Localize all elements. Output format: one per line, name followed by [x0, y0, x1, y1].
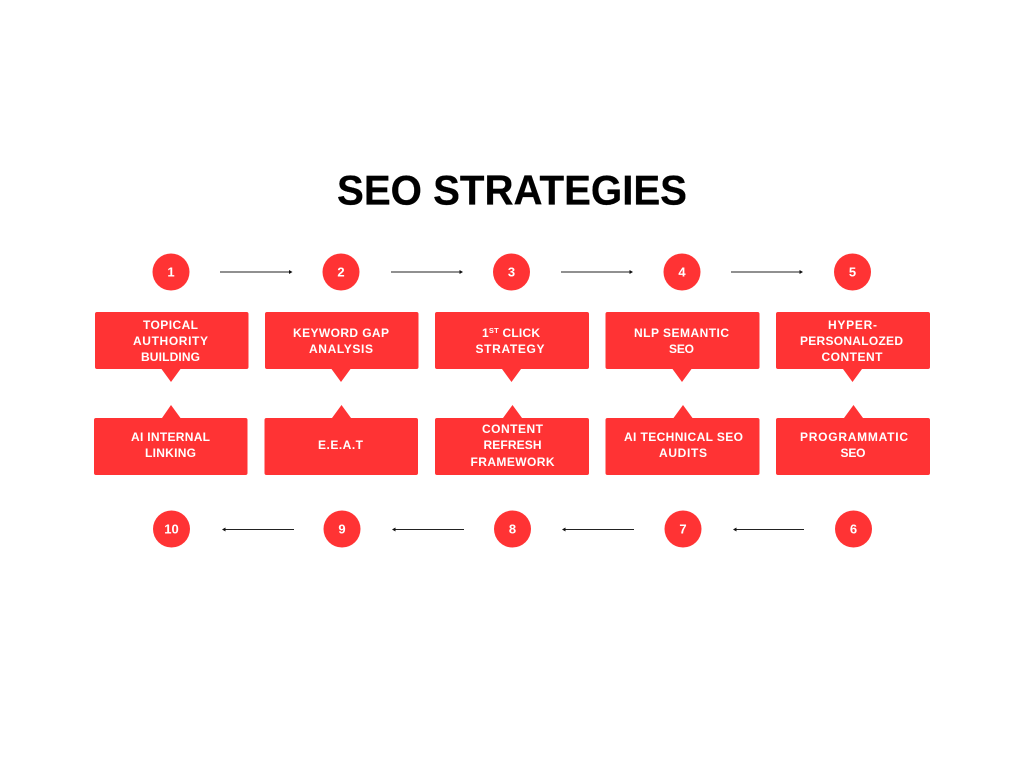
card 2: keyword gap analysis: ANALYSIS [309, 342, 373, 356]
card 1: topical authority building [95, 312, 248, 382]
step 4 number [664, 254, 700, 290]
step 5 number [834, 254, 871, 290]
card 7: ai technical seo audits [606, 405, 760, 475]
step 9 number: 9 [338, 522, 346, 536]
arrow 8 to 9 [392, 528, 464, 532]
card 4: nlp semantic seo: SEO [669, 342, 694, 356]
card 7: ai technical seo audits: AI TECHNICAL SEO [624, 430, 743, 444]
card 6: programmatic seo: PROGRAMMATIC [800, 430, 908, 444]
card 3: first click strategy: STRATEGY [476, 342, 544, 356]
card 5: hyper-personalized content: PERSONALOZED [800, 334, 903, 348]
card 2: keyword gap analysis: KEYWORD GAP [293, 326, 389, 340]
arrow 1 to 2 [220, 270, 292, 274]
card 2: keyword gap analysis [265, 312, 418, 382]
step 4 number: 4 [678, 264, 686, 280]
arrow 7 to 8 [562, 528, 634, 532]
card 9: e.e.a.t [264, 405, 418, 475]
card 5: hyper-personalized content [776, 312, 930, 382]
card 6: programmatic seo: SEO [840, 446, 866, 460]
card 4: nlp semantic seo [606, 312, 760, 382]
card 6: programmatic seo [776, 405, 930, 475]
card 5: hyper-personalized content: CONTENT [822, 350, 883, 364]
card 10: ai internal linking: AI INTERNAL [131, 430, 210, 444]
card 10: ai internal linking [94, 405, 248, 475]
arrow 4 to 5 [731, 270, 803, 274]
step 3 number: 3 [508, 264, 515, 280]
card 7: ai technical seo audits: AUDITS [659, 446, 707, 460]
arrow 3 to 4 [561, 270, 633, 274]
step 5 number: 5 [849, 264, 856, 280]
step 10 number [153, 510, 190, 548]
card 8: content refresh framework: FRAMEWORK [470, 455, 555, 469]
card 8: content refresh framework: REFRESH [484, 438, 542, 452]
step 3 number [493, 254, 530, 290]
card 1: topical authority building: AUTHORITY [133, 334, 208, 348]
card 5: hyper-personalized content: HYPER- [828, 318, 877, 332]
step 1 number [152, 254, 190, 290]
step 6 number: 6 [850, 522, 857, 536]
arrow 2 to 3 [391, 270, 463, 274]
card 3: first click strategy: 1 [482, 326, 489, 340]
card 3: first click strategy: CLICK [499, 326, 540, 340]
card 4: nlp semantic seo: NLP SEMANTIC [634, 326, 729, 340]
step 8 number: 8 [509, 522, 516, 536]
step 1 number: 1 [167, 264, 175, 280]
arrow 6 to 7 [733, 528, 804, 532]
card 10: ai internal linking: LINKING [145, 446, 196, 460]
title: SEO STRATEGIES [337, 166, 687, 214]
step 7 number [664, 510, 702, 548]
step 2 number: 2 [337, 264, 345, 280]
card 9: e.e.a.t: E.E.A.T [318, 438, 364, 452]
card 8: content refresh framework [435, 405, 589, 475]
step 6 number [835, 510, 872, 548]
step 7 number: 7 [679, 522, 687, 536]
card 1: topical authority building: BUILDING [141, 350, 200, 364]
card 1: topical authority building: TOPICAL [143, 318, 198, 332]
card 8: content refresh framework: CONTENT [482, 422, 544, 436]
card 3: first click strategy [435, 312, 589, 382]
step 9 number [324, 510, 360, 548]
step 8 number [494, 510, 531, 548]
arrow 9 to 10 [222, 528, 294, 532]
step 10 number: 10 [164, 522, 179, 536]
card 3: first click strategy: ST [489, 326, 499, 335]
step 2 number [322, 254, 360, 290]
